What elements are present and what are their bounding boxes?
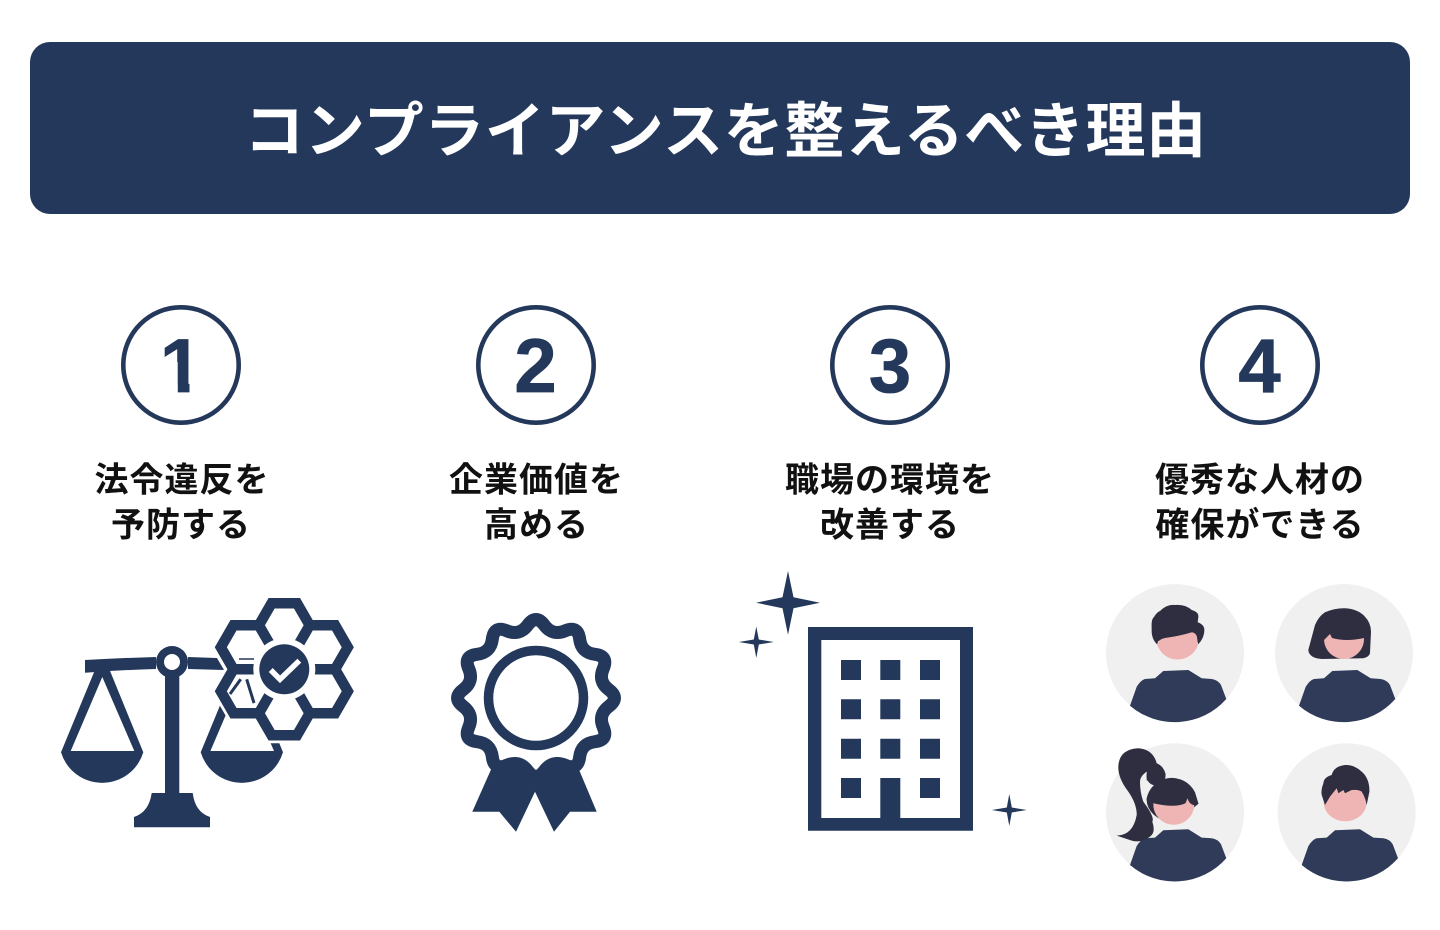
avatar 2 [1275,584,1413,722]
avatar 4 [1278,743,1416,881]
label 2: 企業価値を [449,462,624,500]
right pan [201,665,283,783]
sparkle small left [739,626,774,658]
icon: award rosette [458,620,614,832]
column 4: secure talented people [1106,307,1416,881]
avatar 3 [1106,743,1244,881]
sparkle small right [992,794,1027,826]
label 4: 優秀な人材の [1155,462,1365,500]
label 4: 確保ができる [1155,506,1365,544]
left pan [61,665,143,783]
number badge 3: 3 [869,324,911,409]
scale pivot and post [134,670,210,827]
icon: scales with compliance hexagons [61,603,348,827]
column 2: raise corporate value [449,307,624,832]
sparkle large [756,571,820,635]
number badge 1 [123,307,239,423]
column 3: improve workplace environment [739,307,1027,831]
number badge 4 [1202,307,1318,423]
windows [841,660,940,798]
title banner [30,42,1410,214]
inner ring [488,650,584,746]
number badge 2 [478,307,594,423]
label 3: 改善する [820,506,960,544]
label 2: 高める [484,506,589,544]
icon: four people avatars [1106,584,1416,881]
label 1: 予防する [111,506,251,544]
building [808,627,973,831]
label 3: 職場の環境を [785,462,995,500]
label 1: 法令違反を [94,462,270,500]
rosette ribbons [472,760,597,832]
check circle [253,638,315,700]
title: コンプライアンスを整えるべき理由 [244,98,1207,165]
number badge 3 [832,307,948,423]
scalloped edge [458,620,614,776]
avatar 1 [1106,584,1244,722]
number badge 1: 1 [160,324,202,409]
scale beam [85,657,224,673]
number badge 2: 2 [514,324,557,409]
icon: sparkling building [739,571,1027,831]
hexagon cluster [221,603,348,735]
number badge 4: 4 [1238,324,1281,409]
column 1: prevent legal violations [61,307,348,827]
